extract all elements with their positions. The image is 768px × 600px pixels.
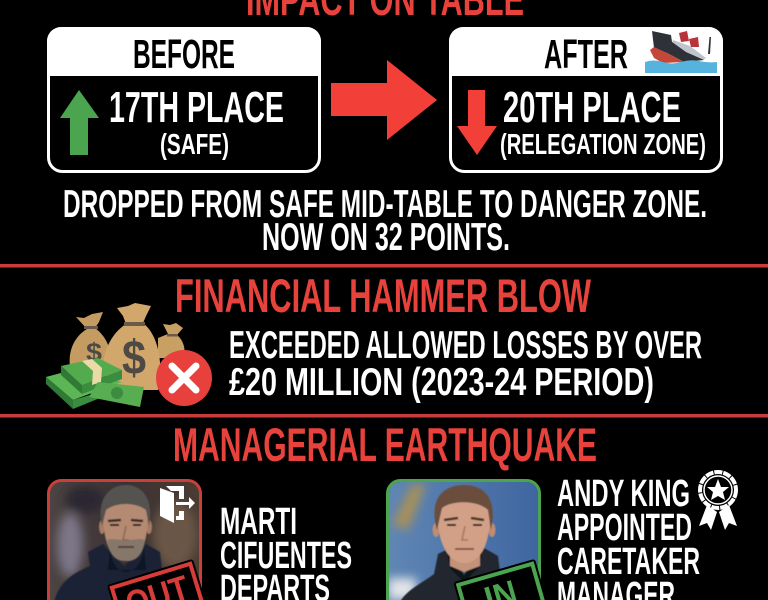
text: financial detail	[229, 331, 702, 403]
heading: before: BEFORE	[133, 31, 235, 77]
icon: green up arrow	[60, 90, 99, 155]
arrow: before to after	[331, 60, 437, 140]
icon: award rosette	[699, 472, 737, 530]
panel: after	[449, 27, 723, 172]
text: table summary: NOW ON 32 POINTS.	[262, 216, 510, 259]
panel: manager out	[48, 480, 352, 600]
icon: exit door	[160, 486, 195, 523]
text: marti cifuentes departs: MARTI	[220, 501, 297, 543]
text: 17th place: 17TH PLACE	[109, 83, 284, 132]
text: safe: (SAFE)	[160, 129, 229, 161]
icon: money bags with cross: $	[122, 332, 146, 385]
stamp: in	[453, 559, 548, 600]
icon: sinking ship	[645, 31, 717, 73]
panel: manager in	[388, 472, 737, 600]
text: 20th place: 20TH PLACE	[503, 83, 681, 132]
text: marti cifuentes departs: CIFUENTES	[220, 535, 352, 577]
text: marti cifuentes departs	[220, 501, 352, 600]
panel: before	[47, 27, 321, 172]
photo: andy king	[388, 482, 538, 600]
text: andy king appointed caretaker manager	[557, 473, 700, 600]
heading: after: AFTER	[544, 31, 628, 77]
photo: marti cifuentes	[50, 482, 199, 600]
text: table summary	[64, 190, 706, 250]
icon: red cross circle	[156, 350, 212, 406]
icon: red down arrow	[457, 90, 497, 155]
stamp: out	[107, 559, 207, 600]
icon: money bags with cross: $	[86, 337, 103, 367]
text: andy king appointed caretaker manager: ANDY KING	[557, 473, 690, 515]
icon: money bags with cross	[46, 303, 212, 409]
